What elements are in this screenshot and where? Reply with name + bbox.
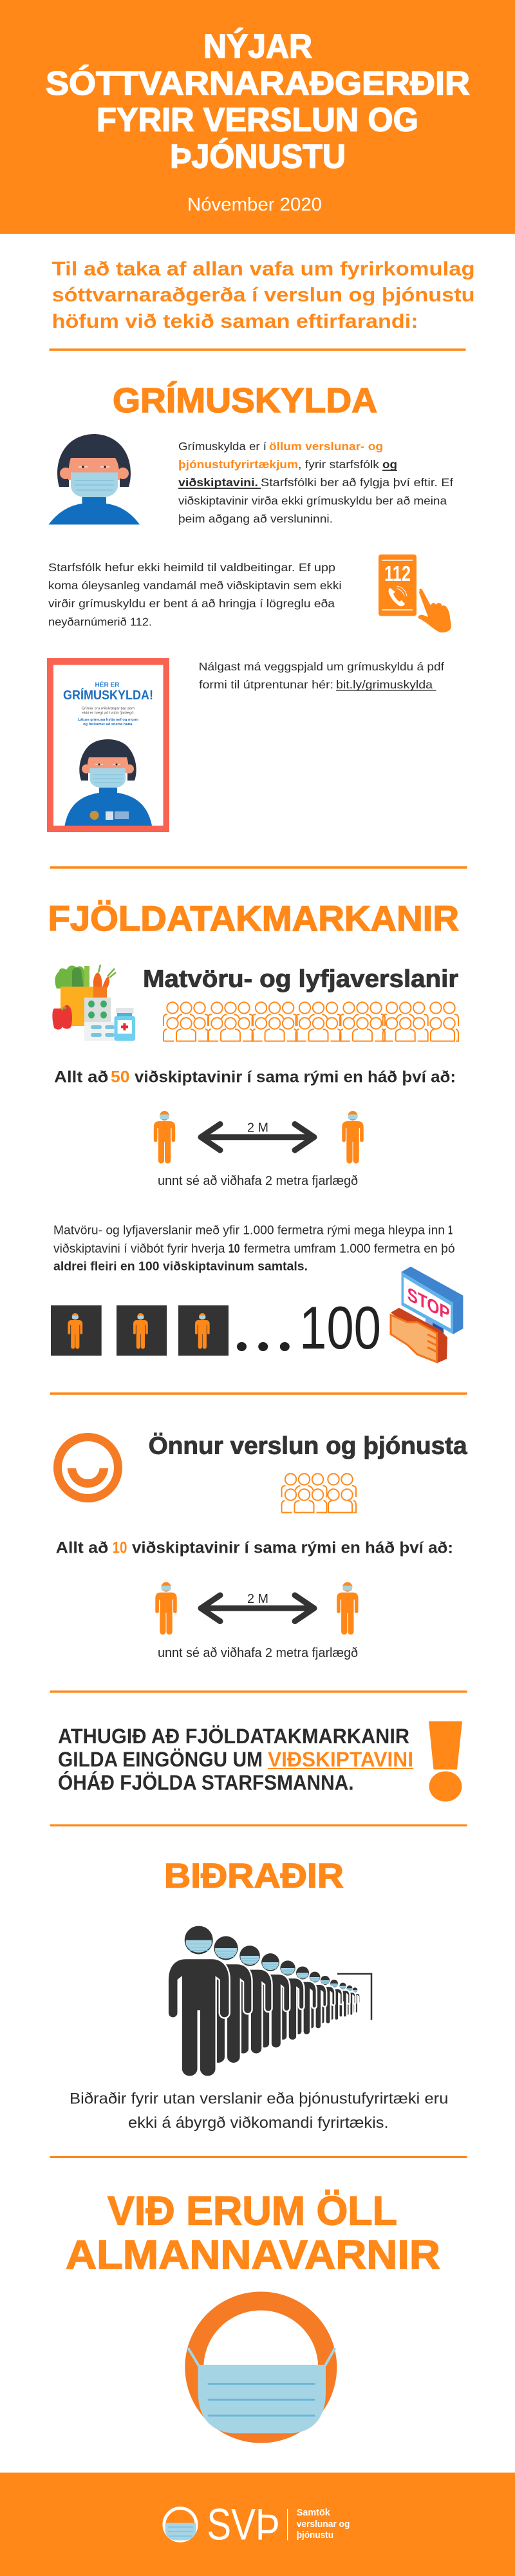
poster small text: [78, 706, 138, 726]
title: FYRIR VERSLUN OG: [97, 102, 418, 139]
text block: large store rule: fermetra umfram 1.000 fermetra en þó: [244, 1242, 455, 1256]
text block: mask obligation: þeim aðgang að versluninni.: [178, 513, 333, 526]
figure left: [155, 1582, 177, 1634]
text block: poster link: [199, 660, 444, 691]
statement: up to 10 customers: 10: [112, 1539, 127, 1557]
heading: we are all civil protection: VIÐ ERUM ÖLL: [108, 2188, 397, 2233]
caption: 2 metres distance: unnt sé að viðhafa 2 metra fjarlægð: [158, 1646, 358, 1660]
caption: 2 metres distance: unnt sé að viðhafa 2 metra fjarlægð: [158, 1174, 358, 1188]
intro text: sóttvarnaraðgerða í verslun og þjónustu: [52, 283, 475, 306]
squares with figures: [51, 1305, 229, 1356]
callout: note on limits: ÓHÁÐ FJÖLDA STARFSMANNA.: [58, 1771, 354, 1794]
poster thumbnail: [47, 658, 169, 832]
callout: note on limits: VIÐSKIPTAVINI: [268, 1748, 413, 1771]
icon: exclamation mark: [429, 1721, 462, 1802]
text block: mask obligation: þjónustufyrirtækjum: [178, 458, 298, 471]
text block: mask obligation: Starfsfólki ber að fylgja því eftir. Ef: [261, 476, 453, 489]
heading: we are all civil protection: ALMANNAVARNIR: [66, 2232, 440, 2277]
statement: up to 50 customers: Allt að: [54, 1068, 108, 1086]
icon: crowd of 10: [282, 1473, 356, 1513]
text block: large store rule: aldrei fleiri en 100 viðskiptavinum samtals.: [53, 1260, 308, 1274]
heading: we are all civil protection: [66, 2188, 440, 2277]
text block: staff authority: Starfsfólk hefur ekki heimild til valdbeitingar. Ef upp: [48, 561, 335, 574]
statement: up to 10 customers: viðskiptavinir í sama rými en háð því að:: [132, 1539, 453, 1557]
text block: large store rule: viðskiptavini í viðbót fyrir hverja: [53, 1242, 225, 1256]
title: ÞJÓNUSTU: [170, 138, 346, 176]
text block: queues: [70, 2090, 448, 2132]
callout: note on limits: GILDA EINGÖNGU UM: [58, 1748, 263, 1771]
header band: [0, 0, 515, 234]
distance diagram: [154, 1111, 364, 1164]
icon: queue of masked people: [168, 1926, 371, 2077]
callout: note on limits: [58, 1725, 413, 1794]
arrow: 2 metres: [201, 1595, 314, 1622]
text block: staff authority: [48, 561, 342, 629]
icon: masked person: [49, 434, 140, 524]
text block: staff authority: virðir grímuskyldu er bent á að hringja í lögreglu eða: [48, 597, 335, 610]
text block: poster link: Nálgast má veggspjald um grímuskyldu á pdf: [199, 660, 444, 673]
icon: stop sign held by hand: STOP: [407, 1283, 450, 1325]
number 100: 100: [299, 1294, 381, 1361]
text block: large store rule: 1: [448, 1224, 453, 1238]
ellipsis dots: [237, 1342, 290, 1351]
poster person: [64, 739, 152, 826]
statement: up to 10 customers: Allt að: [56, 1539, 108, 1557]
callout: note on limits: ATHUGIÐ AÐ FJÖLDATAKMARKANIR: [58, 1725, 409, 1748]
statement: up to 50 customers: 50: [111, 1068, 130, 1086]
text block: poster link: bit.ly/grimuskylda: [336, 678, 433, 691]
icon: crowd of 50: [164, 1002, 458, 1041]
label 2 M: 2 M: [247, 1121, 268, 1135]
footer organisation name: þjónustu: [297, 2530, 333, 2541]
text block: mask obligation: Grímuskylda er í: [178, 440, 267, 453]
text block: mask obligation: viðskiptavinir virða ekki grímuskyldu ber að meina: [178, 495, 447, 507]
footer organisation name: Samtök: [297, 2507, 330, 2518]
distance diagram 2: [155, 1582, 359, 1634]
heading: biðraðir: BIÐRAÐIR: [164, 1857, 344, 1895]
intro text: höfum við tekið saman eftirfarandi:: [52, 310, 418, 332]
label 2 M: 2 M: [247, 1592, 268, 1606]
text block: mask obligation: og: [382, 458, 397, 471]
heading: fjöldatakmarkanir: FJÖLDATAKMARKANIR: [48, 898, 459, 938]
footer organisation name: [297, 2507, 350, 2541]
icon: smile logo: [58, 1437, 118, 1498]
title: SÓTTVARNARAÐGERÐIR: [46, 65, 470, 102]
text block: queues: ekki á ábyrgð viðkomandi fyrirtækis.: [128, 2114, 389, 2132]
statement: up to 50 customers: viðskiptavinir í sama rými en háð því að:: [135, 1068, 456, 1086]
poster headline: GRÍMUSKYLDA!: [63, 688, 153, 703]
footer wordmark: SVÞ: [207, 2500, 280, 2550]
title: NÝJAR: [203, 27, 312, 66]
icon: stop sign held by hand: [391, 1267, 463, 1363]
text block: large store rule: [53, 1224, 455, 1274]
footer logo mark: [164, 2508, 196, 2541]
heading: grímuskylda: GRÍMUSKYLDA: [113, 381, 377, 420]
icon: groceries and medicine: [52, 965, 135, 1041]
text block: poster link: formi til útprentunar hér:: [199, 678, 333, 691]
poster small text: ekki er hægt að halda fjarlægð.: [82, 711, 135, 715]
text block: mask obligation: viðskiptavini.: [178, 476, 258, 489]
icon: phone 112 with pointing hand: 112: [384, 562, 411, 585]
text block: mask obligation: [178, 440, 453, 526]
poster small text: Látum grímuna hylja nef og munn: [78, 718, 138, 722]
poster headline: HÉR ER: [95, 680, 120, 689]
text block: staff authority: koma óleysanleg vandamál með viðskiptavin sem ekki: [48, 579, 342, 592]
text block: mask obligation: , fyrir starfsfólk: [298, 458, 379, 471]
text block: large store rule: Matvöru- og lyfjaverslanir með yfir 1.000 fermetra rými mega hleypa inn: [53, 1224, 445, 1238]
intro text: Til að taka af allan vafa um fyrirkomulag: [52, 258, 475, 279]
poster headline: [63, 680, 153, 703]
text block: mask obligation: öllum verslunar- og: [269, 440, 383, 453]
text block: queues: Biðraðir fyrir utan verslanir eða þjónustufyrirtæki eru: [70, 2090, 448, 2107]
subheading: other retail and services: Önnur verslun og þjónusta: [149, 1432, 467, 1459]
footer band: [0, 2473, 515, 2576]
arrow: 2 metres: [201, 1124, 314, 1150]
title: [46, 27, 470, 176]
date: Nóvember 2020: [187, 194, 322, 215]
figure right: [342, 1111, 364, 1164]
poster small text: og forðumst að snerta hana.: [83, 722, 134, 726]
poster small text: Grímur eru mikilvægar þar sem: [81, 706, 135, 710]
logo: ring with mask: [188, 2301, 335, 2434]
text block: large store rule: 10: [229, 1242, 240, 1256]
icon: phone 112 with pointing hand: [379, 554, 451, 632]
intro text: [52, 258, 475, 332]
text block: staff authority: neyðarnúmerið 112.: [48, 616, 152, 629]
subheading: grocery and pharmacy: Matvöru- og lyfjaverslanir: [143, 966, 458, 993]
figure left: [154, 1111, 175, 1164]
footer organisation name: verslunar og: [297, 2519, 350, 2530]
figure right: [337, 1582, 358, 1634]
